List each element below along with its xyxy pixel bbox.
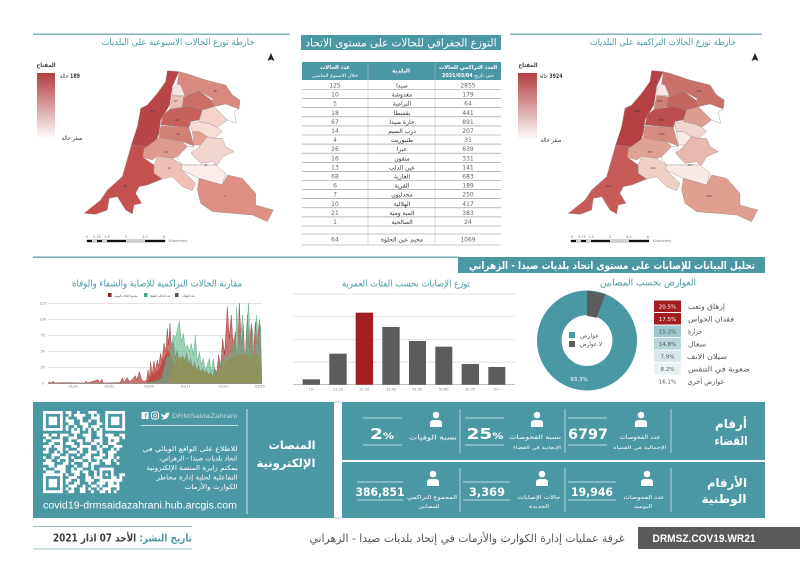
table: cases by municipality: صيدا	[396, 82, 408, 90]
legend: symptom percentages: سيلان الانف	[687, 352, 727, 361]
platforms description: يمكنم زايرة المنصة الإلكترونية	[146, 464, 238, 472]
map legend	[518, 62, 562, 144]
table: cases by municipality: 21	[331, 210, 339, 217]
chart: time series of cases, recoveries and deaths: 125	[39, 302, 46, 306]
stat: new cases: حالات الإصابات	[518, 495, 560, 501]
chart: symptoms donut: 93.3%	[570, 377, 588, 383]
stat: positive rate: نسبة الفحوصات	[509, 434, 561, 441]
scale bar: 0	[86, 235, 88, 239]
stat: total tests: عدد الفحوصات	[620, 434, 660, 441]
chart: cases by age group	[293, 294, 515, 391]
table: cases by municipality: 683	[462, 174, 474, 180]
map legend: 3924 حالة	[540, 73, 562, 80]
table: cases by municipality: درب السيم	[388, 128, 416, 135]
publication date: تاريخ النشر: الأحد 07 اذار 2021	[53, 532, 192, 544]
table: cases by municipality: الهلالية	[394, 201, 411, 208]
stat: cumulative cases	[356, 471, 458, 510]
stat: total tests	[568, 412, 666, 451]
table: cases by municipality: 4	[333, 137, 337, 144]
map legend: المفتاح	[518, 62, 538, 69]
table: cases by municipality: عين الدلب	[389, 164, 415, 171]
map labels: 383	[688, 163, 693, 167]
platforms description: للاطلاع على الواقع الوبائي في	[142, 445, 238, 453]
table: cases by municipality: 2855	[460, 82, 476, 90]
chart: cases by age group: 61-70	[465, 387, 475, 391]
panel: online platforms	[33, 402, 334, 518]
map labels: 639	[660, 132, 665, 136]
icon: north arrow	[752, 53, 758, 61]
table: cases by municipality: البرامية	[393, 101, 412, 108]
platforms description: الكوارث والأزمات	[184, 482, 238, 491]
table: cases by municipality: عبرا	[397, 146, 407, 153]
table: cases by municipality: المية ومية	[389, 210, 415, 217]
table: cases by municipality: 125	[329, 82, 341, 90]
social handle: DRMSaidaZahrani	[172, 413, 237, 420]
scale bar: 6	[647, 235, 649, 239]
chart: symptoms donut: عوارض	[580, 332, 599, 340]
top rule left	[33, 34, 290, 35]
chart: time series of cases, recoveries and deaths: 01/01	[105, 385, 114, 389]
stat: daily tests: عدد الفحوصات	[624, 495, 664, 501]
right map title: خارطة توزع الحالات التراكمية على البلديات	[590, 38, 736, 48]
footer organisation name: غرفة عمليات إدارة الكوارث والأزمات في إتحاد بلديات صيدا - الزهراني	[310, 531, 625, 545]
table: cases by municipality: 441	[462, 110, 474, 117]
map labels: 68	[175, 118, 179, 122]
stat: positive rate: 25 %	[466, 425, 504, 443]
chart: time series of cases, recoveries and deaths: 100	[39, 318, 46, 322]
district heading	[714, 416, 748, 448]
table: cases by municipality: الصالحية	[391, 219, 413, 226]
table: cases by municipality: عدد الحالات	[320, 65, 350, 71]
table: cases by municipality: 417	[462, 201, 474, 208]
chart title: cumulative comparison: مقارنة الحالات التراكمية للإصابة والشفاء والوفاة	[72, 278, 242, 290]
scale bar: 4.5	[142, 235, 148, 239]
map labels: 441	[697, 89, 702, 93]
scale bar: 0.75	[578, 235, 586, 239]
legend: symptom percentages: 16.1%	[659, 379, 676, 385]
map labels	[123, 89, 226, 198]
icon: QR code	[43, 412, 125, 492]
chart: time series of cases, recoveries and deaths: 01/11	[181, 385, 190, 389]
scale bar: 6	[163, 235, 165, 239]
table: cases by municipality: 7	[333, 192, 337, 199]
legend: symptom percentages: 8.2%	[661, 367, 674, 373]
table: cases by municipality: 10	[331, 92, 339, 99]
map: weekly choropleth	[84, 71, 273, 222]
chart: cases by age group: 10-	[309, 387, 315, 391]
scale bar	[571, 235, 672, 243]
legend: symptom percentages: 7.9%	[661, 354, 674, 360]
table: cases by municipality: 67	[331, 119, 339, 126]
stat: total tests: 6797	[568, 427, 608, 443]
chart: cases by age group: 21-30	[359, 387, 369, 391]
table: cases by municipality: 31	[464, 137, 472, 144]
panel: district figures	[342, 402, 765, 460]
map legend: صفر حالة	[62, 135, 82, 142]
table: cases by municipality: 331	[462, 155, 474, 162]
panel: weekly cases map	[36, 53, 274, 243]
scale bar: 4.5	[626, 235, 632, 239]
map labels: 250	[707, 194, 712, 198]
table: cases by municipality: العدد التراكمي للحالات	[439, 64, 497, 71]
table: cases by municipality: 64	[464, 101, 472, 108]
divider	[246, 409, 248, 514]
map labels: 125	[151, 109, 156, 113]
national heading	[702, 475, 747, 507]
scale bar: Kilometers	[653, 239, 672, 243]
table: cases by municipality: 13	[331, 164, 339, 171]
legend: symptom percentages: فقدان الحواس	[688, 314, 734, 324]
top rule right	[510, 34, 762, 35]
legend: symptom percentages: عوارض أخرى	[688, 376, 724, 386]
table: cases by municipality: حارة صيدا	[389, 119, 415, 126]
chart: time series of cases, recoveries and deaths: 25	[41, 366, 45, 370]
stat: cumulative cases: للمصابين	[418, 504, 440, 510]
report code	[638, 527, 800, 549]
chart legend: عدد الوفيات	[182, 294, 194, 298]
chart: time series of cases, recoveries and deaths: 01/01	[219, 385, 228, 389]
table: cases by municipality: 189	[462, 183, 474, 190]
chart legend: مجموع الحالات اليومية	[114, 294, 138, 298]
publication date	[33, 526, 192, 549]
rule: analysis section	[33, 256, 459, 258]
chart: time series of cases, recoveries and deaths: 0	[42, 382, 44, 386]
stat: daily tests: 19,946	[571, 485, 613, 499]
table: cases by municipality: 383	[462, 210, 474, 217]
legend: symptom percentages: 17.5%	[659, 317, 676, 323]
legend: symptom percentages	[654, 300, 750, 386]
chart: cases by age group: 31-40	[386, 387, 396, 391]
heading: data analysis band	[458, 257, 765, 273]
table: cases by municipality: 250	[462, 192, 474, 199]
stat: positive rate: الإيجابية في القضاء	[513, 445, 561, 451]
map labels: 26	[176, 132, 180, 136]
chart: time series of cases, recoveries and deaths	[39, 302, 265, 389]
platforms heading	[256, 438, 316, 471]
stat: new cases: 3,369	[469, 485, 505, 499]
table: cases by municipality: 14	[331, 128, 339, 135]
map labels: 10	[123, 184, 127, 188]
panel: cumulative cases map	[518, 53, 758, 243]
report code: DRMSZ.COV19.WR21	[652, 533, 756, 545]
scale bar	[86, 235, 188, 243]
chart: time series of cases, recoveries and deaths: 01/02	[69, 385, 78, 389]
scale bar: 0.75	[93, 235, 101, 239]
scale bar: 3	[125, 235, 127, 239]
scale bar: Kilometers	[169, 239, 188, 243]
chart: cases by age group: 41-50	[412, 387, 422, 391]
left map title: خارطة توزع الحالات الاسبوعية على البلديات	[102, 38, 254, 48]
chart: cases by age group: 51-60	[439, 387, 448, 391]
heading: geographic distribution: التوزع الجغرافي للحالات على مستوى الاتحاد	[306, 36, 496, 50]
table: cases by municipality: 6	[333, 183, 337, 190]
stat: positive rate	[465, 412, 561, 451]
table: cases by municipality: البلدية	[392, 68, 410, 74]
map labels: 417	[607, 184, 612, 188]
table: cases by municipality: 16	[331, 155, 339, 162]
table: cases by municipality: منقون	[394, 155, 410, 162]
stat: fatality rate: نسبة الوفيات	[409, 434, 457, 442]
chart legend: عدد الحالات الشفاء	[150, 294, 170, 298]
platforms heading: الإلكترونية	[256, 456, 316, 471]
stat: fatality rate	[363, 412, 457, 445]
map labels: 683	[659, 118, 664, 122]
table: cases by municipality: 639	[462, 146, 474, 153]
map legend: المفتاح	[36, 62, 56, 69]
stat: daily tests	[568, 471, 664, 510]
table: cases by municipality: 10	[331, 201, 339, 208]
table: cases by municipality: بقسطا	[394, 110, 411, 117]
table: cases by municipality: الغازية	[394, 174, 410, 180]
map: cumulative choropleth	[568, 71, 758, 222]
map legend: صفر حالة	[540, 137, 562, 144]
scale bar: 1.5	[588, 235, 594, 239]
chart: time series of cases, recoveries and deaths: 75	[41, 334, 45, 338]
table: cases by municipality: 141	[462, 164, 474, 171]
legend: symptom percentages: 20.5%	[659, 304, 676, 310]
table: cases by municipality: 68	[331, 174, 339, 180]
table: cases by municipality: مخيم عين الحلوة	[381, 236, 423, 244]
chart: symptoms donut	[549, 290, 625, 383]
chart: time series of cases, recoveries and deaths: 01/09	[144, 385, 154, 389]
chart: symptoms donut: لا عوارض	[580, 341, 602, 348]
map labels	[607, 89, 712, 198]
chart: cases by age group: 70+	[493, 387, 500, 391]
legend: symptom percentages: إرهاق وتعب	[688, 302, 725, 311]
table: cases by municipality: 1	[333, 219, 337, 226]
map labels: 2855	[634, 109, 641, 113]
frame lines	[334, 402, 342, 518]
table: cases by municipality: 5	[333, 101, 337, 108]
table: cases by municipality: مغدوشة	[392, 92, 412, 99]
scale bar: 3	[609, 235, 611, 239]
table: cases by municipality: 891	[462, 119, 474, 126]
table: cases by municipality: القرية	[395, 183, 410, 190]
map labels: 13	[167, 166, 171, 170]
table: cases by municipality: 26	[331, 146, 339, 153]
rule	[141, 424, 238, 427]
icons: social media	[142, 412, 170, 420]
table: cases by municipality: 18	[331, 110, 339, 117]
table: cases by municipality: طنبوريت	[391, 137, 413, 144]
map labels: 18	[213, 89, 217, 93]
legend: symptom percentages: 14.8%	[659, 342, 676, 348]
map labels: 891	[658, 99, 663, 103]
map legend: 189 حالة	[60, 73, 80, 80]
national heading: الأرقام	[707, 475, 747, 491]
table: cases by municipality	[302, 62, 501, 245]
stat: daily tests: اليومية	[634, 504, 652, 510]
platforms description: اتحاد بلديات صيدا - الزهراني،	[159, 454, 237, 462]
platforms description: التفاعلية لخلية إدارة مخاطر	[155, 474, 238, 482]
platforms heading: المنصات	[268, 438, 316, 452]
url: covid19-drmsaidazahrani.hub.arcgis.com	[43, 500, 237, 512]
table: cases by municipality: 24	[464, 219, 472, 226]
scale bar: 0	[571, 235, 573, 239]
table: cases by municipality: حتى تاريخ 2021/03/04	[442, 73, 494, 79]
chart: time series of cases, recoveries and deaths: 50	[41, 350, 45, 354]
platforms description	[142, 445, 238, 491]
chart title: age groups: توزع الإصابات بحسب الفئات العمرية	[342, 280, 470, 290]
map labels: 141	[651, 166, 656, 170]
stat: new cases	[463, 471, 560, 510]
national heading: الوطنية	[702, 492, 746, 507]
table: cases by municipality: 179	[462, 92, 474, 99]
chart: cases by age group: 11-20	[333, 387, 343, 391]
legend: symptom percentages: 15.2%	[659, 329, 676, 335]
stat: fatality rate: 2 %	[370, 425, 394, 443]
legend: symptom percentages: سعال	[688, 340, 706, 348]
district heading: القضاء	[714, 434, 748, 448]
map labels: 7	[224, 194, 226, 198]
chart: time series of cases, recoveries and deaths: 03/05	[255, 385, 265, 389]
stat: cumulative cases: 386,851	[356, 485, 404, 499]
table: cases by municipality: 207	[462, 128, 474, 135]
table: cases by municipality: 64	[331, 236, 339, 244]
map legend	[36, 62, 82, 142]
icons: social media: f	[145, 414, 148, 420]
stat: total tests: الإجمالية في القضاء	[614, 446, 666, 451]
scale bar: 1.5	[104, 235, 110, 239]
district heading: أرقام	[715, 416, 747, 432]
chart title: symptoms: العوارض بحسب المصابين	[600, 278, 696, 288]
map labels: 16	[164, 150, 168, 154]
icon: north arrow	[268, 53, 274, 61]
chart legend	[108, 293, 194, 298]
stat: new cases: الجديدة	[529, 504, 549, 510]
table: cases by municipality: 1069	[460, 236, 476, 244]
heading: data analysis band: تحليل البيانات للإصابات على مستوى اتحاد بلديات صيدا - الزهراني	[469, 260, 755, 272]
panel: national figures	[342, 462, 765, 518]
legend: symptom percentages: حرارة	[688, 327, 702, 336]
map labels: 67	[174, 99, 178, 103]
map labels: 331	[648, 150, 653, 154]
table: cases by municipality: خلال الاسبوع الماضي	[312, 74, 358, 79]
table: cases by municipality: مجدليون	[391, 192, 413, 199]
legend: symptom percentages: ضعوبة في التنفس	[688, 364, 750, 374]
map labels: 21	[204, 163, 208, 167]
stat: cumulative cases: المجموع التراكمي	[407, 494, 458, 501]
